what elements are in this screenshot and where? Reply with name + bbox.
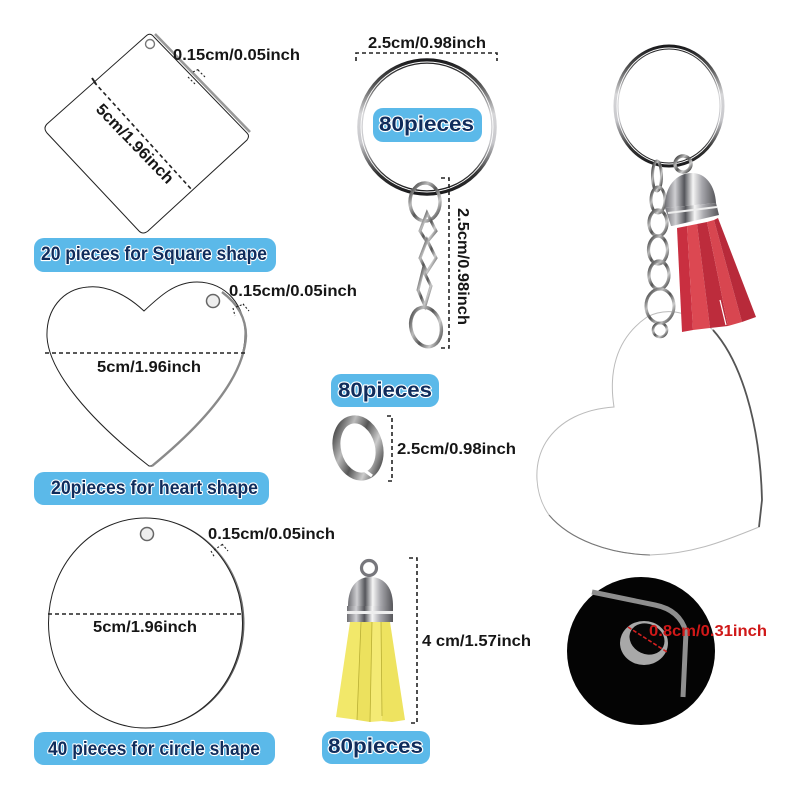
- dimension: jump ring size: [386, 416, 516, 481]
- dimension: tassel length: 4 cm/1.57inch: [422, 633, 531, 650]
- label: 80 pieces tassels: 80pieces: [328, 735, 423, 758]
- panel: key ring with chain: [356, 35, 497, 350]
- panel: hole close-up: [567, 577, 767, 725]
- icon: chain: [646, 161, 674, 337]
- dimension: heart thickness: 0.15cm/0.05inch: [229, 283, 357, 300]
- icon: square acrylic blank: [45, 34, 250, 233]
- dimension: chain length: [441, 178, 471, 348]
- label: 20 pieces for heart shape: [34, 472, 269, 505]
- panel: circle shape: [34, 518, 335, 765]
- label: 20 pieces for heart shape: 20pieces for heart shape: [51, 478, 258, 499]
- icon: yellow tassel: [336, 560, 405, 722]
- label: 40 pieces for circle shape: 40 pieces for circle shape: [48, 739, 260, 760]
- dimension: ring diameter: [356, 35, 497, 61]
- panel: heart shape: [34, 282, 357, 505]
- icon: heart acrylic blank: [47, 282, 246, 466]
- label: 40 pieces for circle shape: [34, 732, 275, 765]
- icon: jump ring: [331, 415, 385, 481]
- dimension: ring diameter: 2.5cm/0.98inch: [368, 35, 486, 52]
- dimension: hole diameter: [628, 623, 767, 652]
- icon: black circle photo: [567, 577, 715, 725]
- dimension: chain length: 2.5cm/0.98inch: [454, 208, 471, 325]
- panel: jump ring: [331, 374, 516, 481]
- dimension: circle thickness: [208, 526, 335, 558]
- dimension: heart width: 5cm/1.96inch: [97, 359, 201, 376]
- icon: large heart blank: [537, 312, 762, 555]
- panel: yellow tassel: [322, 558, 531, 764]
- dimension: jump ring size: 2.5cm/0.98inch: [397, 441, 516, 458]
- label: 80 pieces rings: 80pieces: [379, 113, 474, 136]
- dimension: square thickness: [173, 47, 300, 84]
- label: 20 pieces for square shape: [34, 238, 276, 272]
- dimension: square thickness: 0.15cm/0.05inch: [173, 47, 300, 64]
- icon: red tassel: [665, 156, 756, 332]
- dimension: heart thickness: [229, 283, 357, 316]
- dimension: hole diameter: 0.8cm/0.31inch: [649, 623, 767, 640]
- icon: chain links: [406, 183, 446, 350]
- label: 80 pieces tassels: [322, 731, 430, 764]
- icon: key ring: [616, 47, 722, 165]
- panel: square shape: [34, 34, 300, 272]
- dimension: tassel length: [408, 558, 531, 723]
- label: 80 pieces jump rings: [331, 374, 439, 407]
- label: 20 pieces for square shape: 20 pieces for Square shape: [41, 244, 267, 265]
- dimension: circle width: 5cm/1.96inch: [93, 619, 197, 636]
- panel: assembled keychain: [537, 47, 762, 555]
- icon: circle acrylic blank: [48, 518, 244, 728]
- dimension: square width: 5cm/1.96inch: [92, 101, 177, 188]
- dimension: circle thickness: 0.15cm/0.05inch: [208, 526, 335, 543]
- label: 80 pieces jump rings: 80pieces: [338, 379, 432, 402]
- label: 80 pieces rings: [373, 108, 482, 142]
- dimension: square width: [92, 78, 192, 190]
- icon: split ring: [360, 61, 494, 193]
